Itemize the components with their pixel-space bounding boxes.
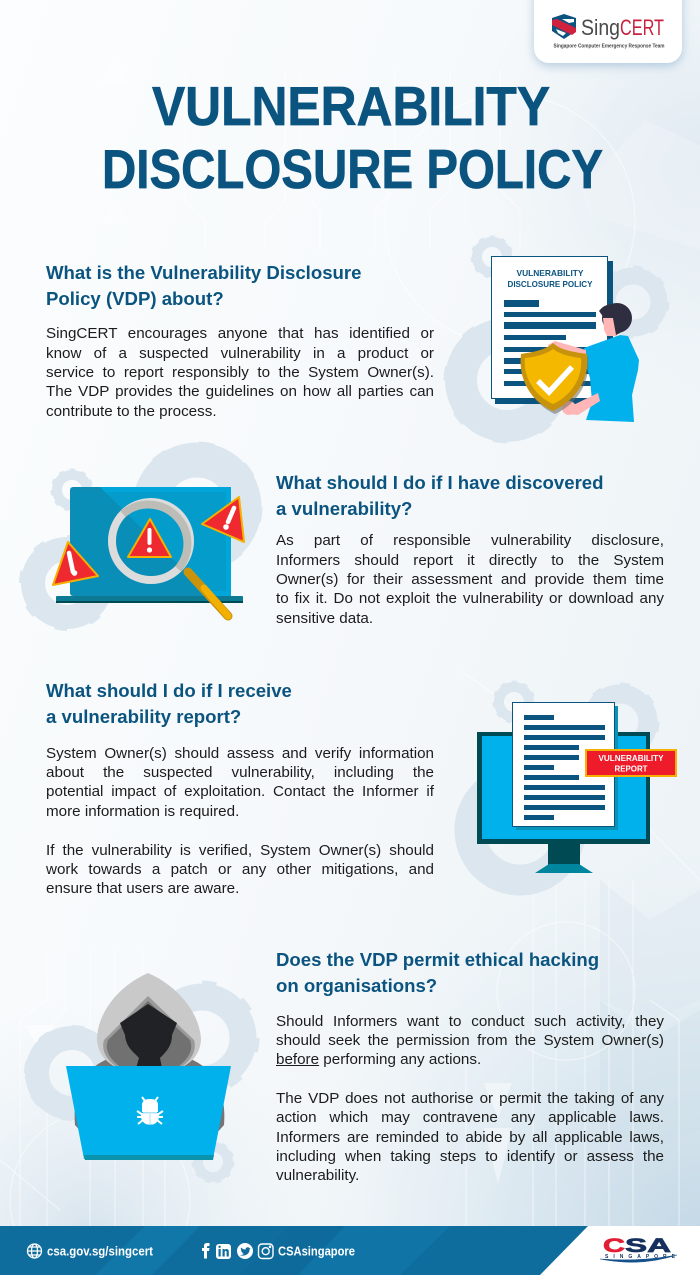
- title: [102, 75, 603, 200]
- body text: work towards a patch or any other mitigations, and: [46, 861, 434, 878]
- body text: Informers are reminded to abide by all applicable laws,: [276, 1129, 664, 1146]
- panel: discovered a vulnerability: [19, 442, 664, 631]
- heading: What should I do if I receive: [46, 680, 292, 701]
- logo: CSA Singapore: [600, 1235, 677, 1262]
- illustration: monitor with report: REPORT: [614, 764, 648, 774]
- body text: service to report responsibly to the System Owner(s).: [46, 364, 434, 381]
- icon: globe: [28, 1244, 42, 1258]
- heading: a vulnerability?: [276, 498, 412, 519]
- footer bar: [0, 1226, 700, 1275]
- logo: SingCERT: [528, 0, 688, 72]
- illustration: policy document with shield and person: DISCLOSURE POLICY: [508, 279, 593, 289]
- body text: The VDP does not authorise or permit the taking of any: [276, 1090, 664, 1107]
- illustration: laptop with magnifier and warnings: [19, 442, 262, 631]
- title: DISCLOSURE POLICY: [102, 138, 603, 200]
- panel: what is the VDP: [46, 236, 670, 444]
- body text: Owner(s) for their assessment and provide them time: [276, 571, 664, 588]
- illustration: monitor with report: [454, 680, 677, 896]
- heading: What is the Vulnerability Disclosure: [46, 262, 361, 283]
- icon: instagram: [258, 1244, 273, 1258]
- body text: know of a suspected vulnerability in a product or: [46, 345, 434, 362]
- logo: SingCERT: CERT: [620, 15, 664, 40]
- body text: [276, 1013, 664, 1184]
- body text: [276, 532, 664, 627]
- heading: [46, 680, 292, 727]
- heading: Does the VDP permit ethical hacking: [276, 949, 599, 970]
- heading: [46, 262, 361, 309]
- body text: contribute to the process.: [46, 403, 217, 420]
- heading: [276, 949, 599, 996]
- body text: vulnerability.: [276, 1167, 359, 1184]
- body text: If the vulnerability is verified, System Owner(s) should: [46, 842, 434, 859]
- body text: Informers should report it directly to the System: [276, 552, 664, 569]
- body text: System Owner(s) should assess and verify information: [46, 745, 434, 762]
- body text: SingCERT encourages anyone that has identified or: [46, 325, 434, 342]
- logo: CSA Singapore: SA: [625, 1235, 671, 1257]
- panel: receive a vulnerability report: [46, 680, 677, 897]
- body text: action which may contravene any applicable laws.: [276, 1109, 664, 1126]
- body text: [46, 745, 434, 897]
- logo: SingCERT: Singapore Computer Emergency Response Team: [554, 44, 665, 50]
- body text: Should Informers want to conduct such activity, they: [276, 1013, 664, 1030]
- title: VULNERABILITY: [152, 75, 550, 137]
- heading: a vulnerability report?: [46, 706, 241, 727]
- icon: twitter: [237, 1243, 253, 1259]
- panel: ethical hacking: [24, 949, 664, 1184]
- body text: before performing any actions.: [276, 1051, 481, 1068]
- logo: CSA Singapore: C: [603, 1235, 625, 1257]
- heading: on organisations?: [276, 975, 437, 996]
- logo: CSA Singapore: SINGAPORE: [605, 1254, 676, 1260]
- social handle: CSAsingapore: [278, 1244, 355, 1258]
- body text: should seek the permission from the System Owner(s): [276, 1032, 664, 1049]
- logo: SingCERT: Sing: [581, 15, 620, 40]
- icon: linkedin: [216, 1244, 231, 1259]
- heading: Policy (VDP) about?: [46, 288, 224, 309]
- heading: What should I do if I have discovered: [276, 472, 604, 493]
- body text: about the suspected vulnerability, including the: [46, 764, 434, 781]
- body text: including when taking steps to identify or assess the: [276, 1148, 664, 1165]
- illustration: policy document with shield and person: [444, 236, 670, 444]
- body text: potential impact of exploitation. Contact the Informer if: [46, 783, 434, 800]
- body text: more information is required.: [46, 803, 239, 820]
- website: csa.gov.sg/singcert: [47, 1244, 154, 1258]
- body text: The VDP provides the guidelines on how all parties can: [46, 383, 434, 400]
- illustration: monitor with report: VULNERABILITY: [598, 754, 664, 763]
- heading: [276, 472, 604, 519]
- body text: [46, 325, 434, 420]
- body text: ensure that users are aware.: [46, 880, 239, 897]
- body text: As part of responsible vulnerability disclosure,: [276, 532, 664, 549]
- icon: facebook: [202, 1243, 210, 1258]
- body text: sensitive data.: [276, 610, 373, 627]
- illustration: policy document with shield and person: VULNERABILITY: [516, 268, 584, 278]
- illustration: hooded hacker with laptop: [24, 973, 260, 1183]
- body text: to fix it. Do not exploit the vulnerability or download any: [276, 590, 664, 607]
